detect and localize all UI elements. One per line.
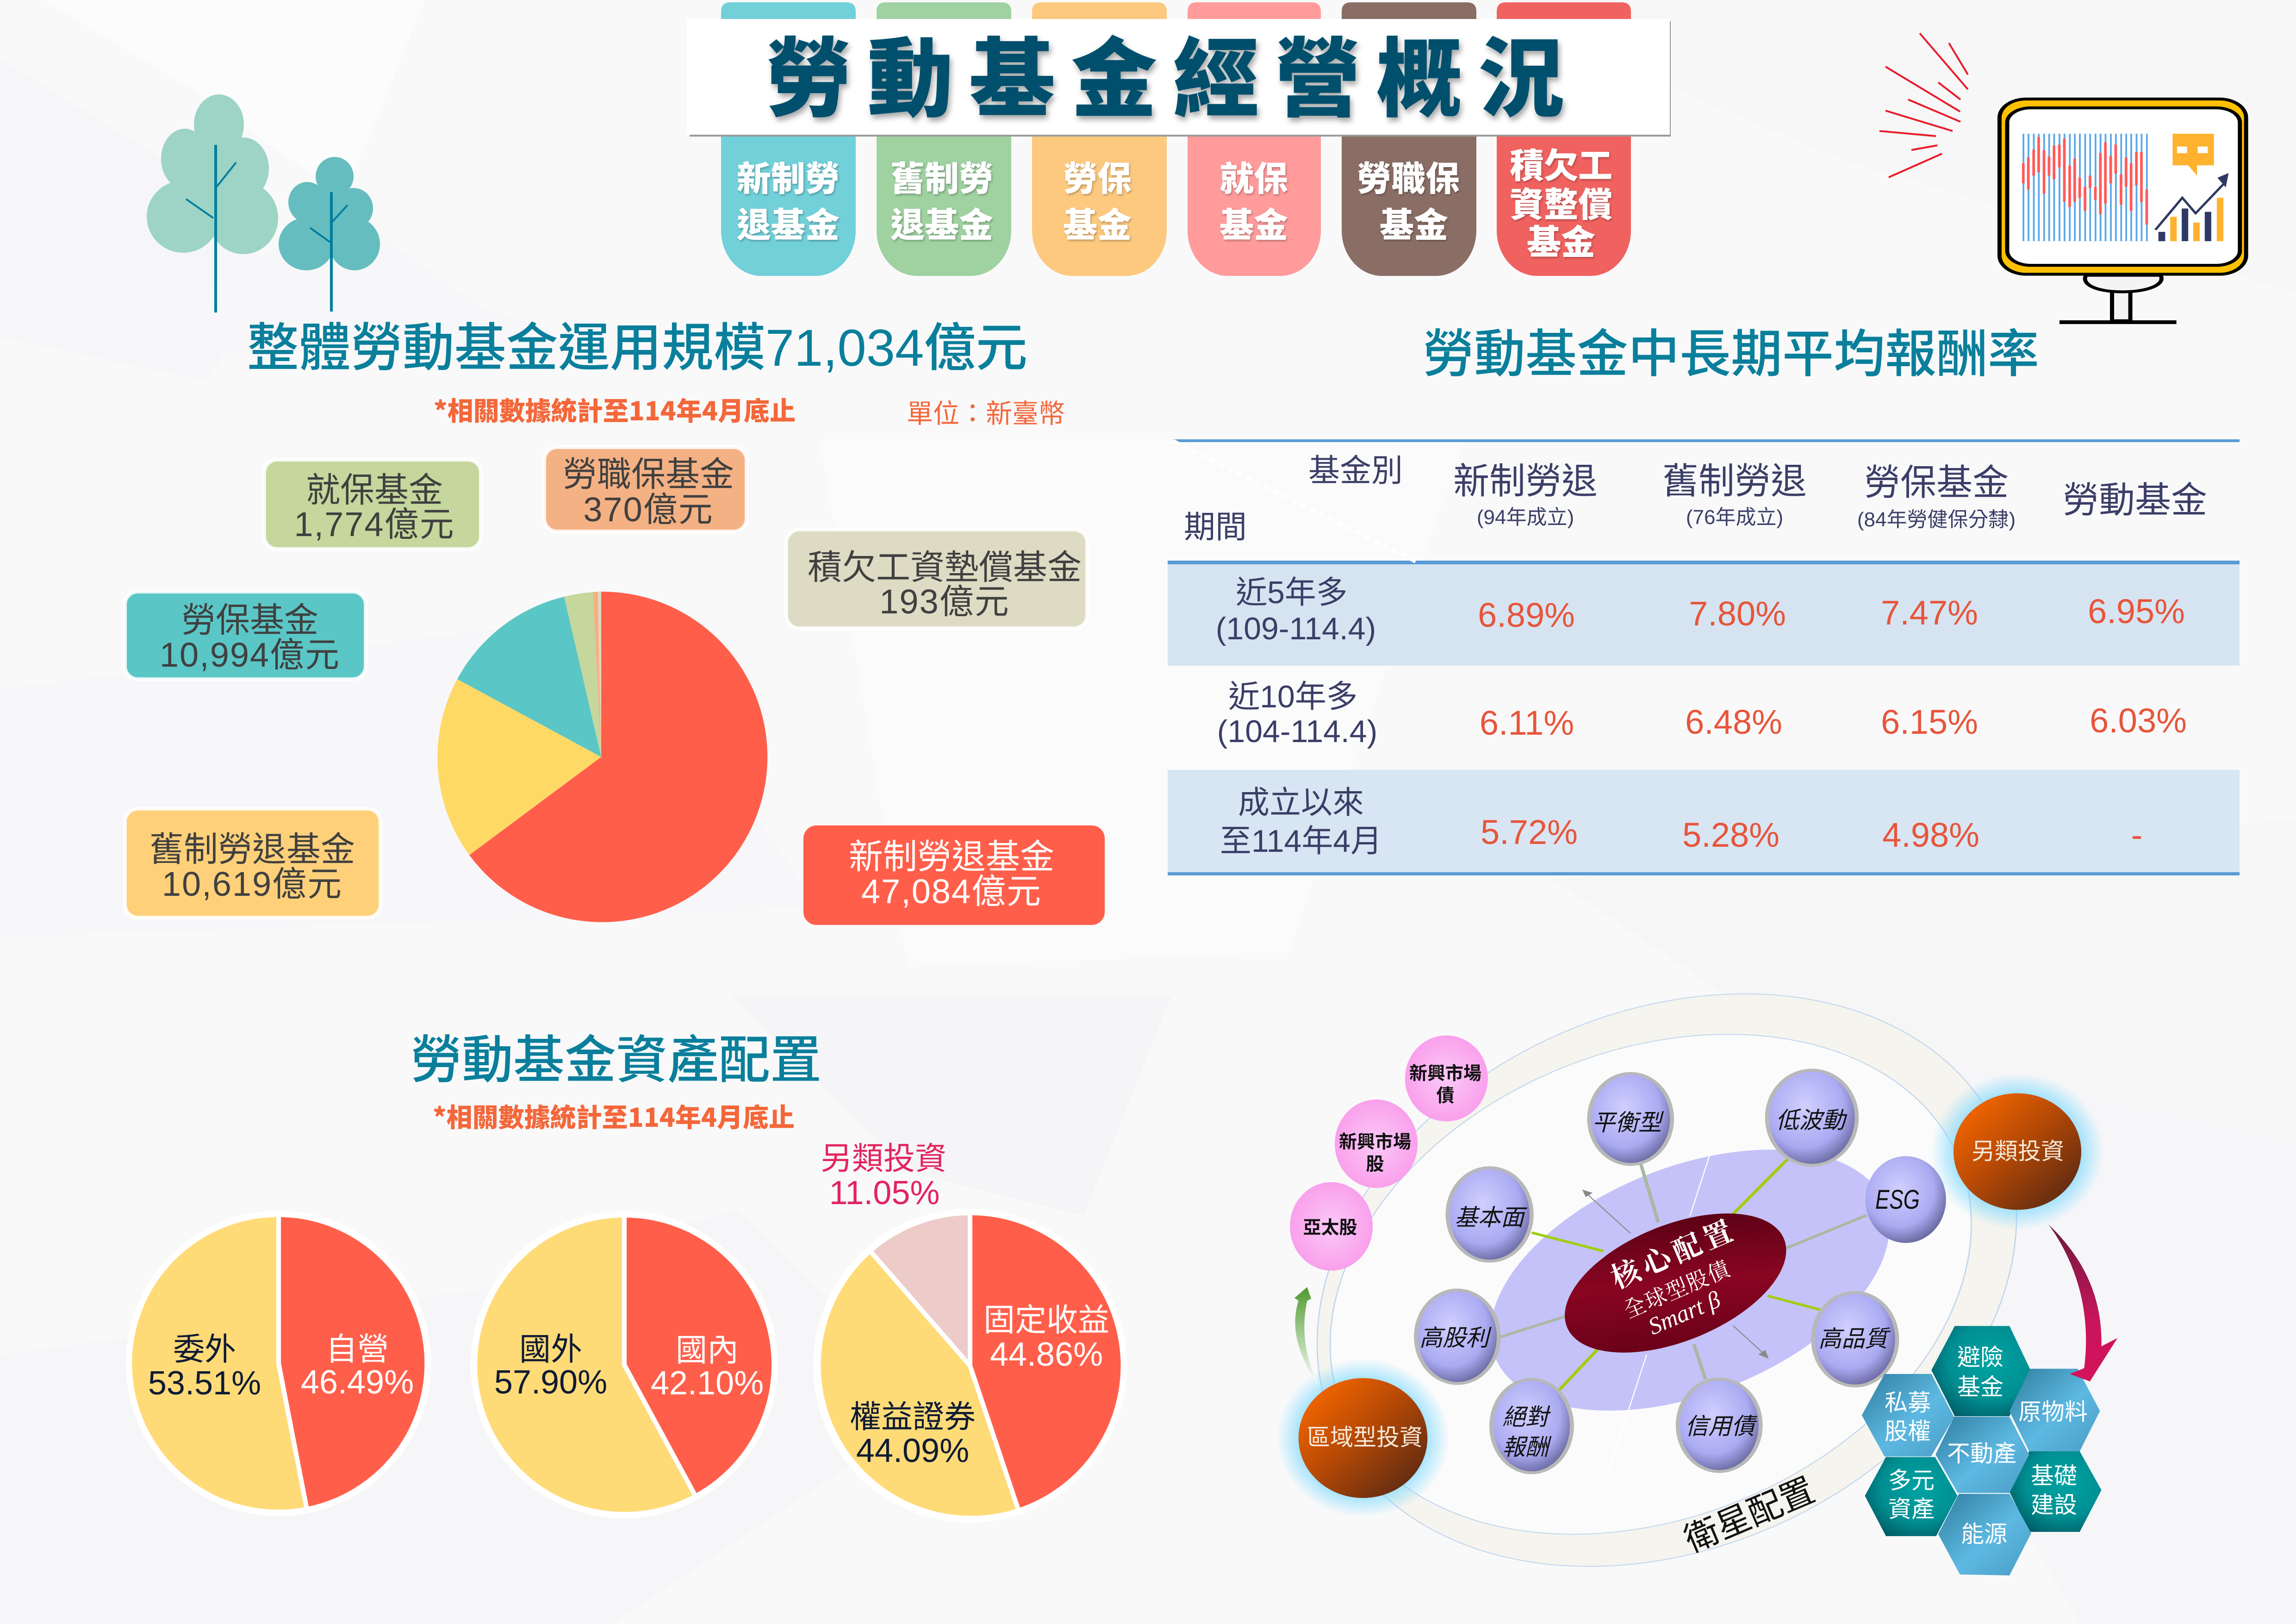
sphere labels: 另類投資 <box>1972 1138 2064 1164</box>
heading: long-term returns: 勞動基金中長期平均報酬率 <box>1423 325 2039 383</box>
table: returns <box>1168 439 2240 875</box>
sphere labels: 絕對 <box>1502 1404 1551 1430</box>
sphere labels: 高品質 <box>1818 1326 1891 1352</box>
pie chart: asset classes: 44.86% <box>990 1336 1103 1373</box>
sphere labels: 低波動 <box>1776 1107 1848 1133</box>
sphere labels: 亞太股 <box>1303 1218 1357 1238</box>
label: employment insurance fund: 1,774億元 <box>294 505 455 543</box>
label: employment insurance fund: 就保基金 <box>306 471 443 509</box>
tab labels: 退基金 <box>890 206 993 244</box>
pie chart: fund size <box>437 592 767 922</box>
arrow: green <box>1294 1287 1319 1386</box>
hexagon labels: 私募 <box>1885 1390 1931 1416</box>
sphere labels <box>1303 1064 2064 1460</box>
heading: total fund size: 整體勞動基金運用規模71,034億元 <box>247 319 1027 377</box>
hexagon labels: 基金 <box>1957 1374 2004 1400</box>
label: alternative investments: 另類投資 <box>821 1141 946 1176</box>
sphere labels: 基本面 <box>1455 1205 1527 1230</box>
table values: 4.98% <box>1882 816 1979 854</box>
satellite ring <box>1178 903 2156 1624</box>
hexagon labels: 資產 <box>1888 1496 1935 1522</box>
table values: 6.11% <box>1480 704 1574 742</box>
diagram shapes <box>1178 903 2156 1624</box>
table header: 期間 <box>1184 510 1247 545</box>
table row labels: 近10年多 <box>1228 679 1358 714</box>
fund tabs <box>721 2 1631 276</box>
table header <box>1184 453 2207 545</box>
table values: 6.95% <box>2088 592 2185 631</box>
label: old pension fund <box>125 809 380 918</box>
label: occupational insurance fund <box>544 447 747 531</box>
tab labels: 新制勞 <box>737 160 840 198</box>
pie chart: domestic vs overseas: 國外 <box>519 1332 582 1367</box>
glass spheres <box>1416 1070 1946 1473</box>
sphere labels: 報酬 <box>1502 1434 1552 1460</box>
hexagon labels: 避險 <box>1957 1344 2004 1370</box>
sphere labels: 信用債 <box>1685 1413 1758 1439</box>
arrow: crimson <box>2048 1224 2117 1381</box>
label: new pension fund <box>803 825 1105 925</box>
table header: 新制勞退 <box>1453 461 1598 501</box>
pie chart: self-managed vs outsourced <box>126 1211 431 1516</box>
sphere labels: 債 <box>1436 1086 1455 1106</box>
tab: old pension <box>877 2 1011 276</box>
pie chart: domestic vs overseas: 57.90% <box>494 1364 607 1401</box>
pie chart: self-managed vs outsourced: 53.51% <box>148 1365 261 1402</box>
tab: new pension <box>721 2 856 276</box>
tab: employment insurance <box>1188 2 1321 276</box>
table row labels: (109-114.4) <box>1216 611 1376 646</box>
label: new pension fund: 47,084億元 <box>861 872 1042 911</box>
hexagon labels: 多元 <box>1888 1468 1935 1493</box>
sphere labels: ESG <box>1875 1185 1920 1215</box>
table row labels: 近5年多 <box>1236 575 1348 610</box>
hexagon labels: 建設 <box>2031 1492 2077 1518</box>
tab labels: 就保 <box>1220 160 1288 198</box>
table values: 6.03% <box>2090 701 2187 740</box>
table header: 基金別 <box>1308 453 1403 488</box>
table row labels: 成立以來 <box>1238 785 1364 820</box>
table header: 勞動基金 <box>2063 480 2207 520</box>
pie chart: asset classes: 權益證券 <box>850 1399 976 1435</box>
tab labels: 基金 <box>1380 206 1448 244</box>
tab labels: 基金 <box>1527 223 1595 262</box>
pink spheres <box>1290 1036 1488 1271</box>
pie chart: domestic vs overseas: 42.10% <box>651 1365 764 1402</box>
hexagon labels: 股權 <box>1885 1418 1931 1444</box>
tab: labor insurance <box>1032 2 1167 276</box>
label: employment insurance fund <box>264 460 481 549</box>
pie chart: self-managed vs outsourced: 自營 <box>326 1332 389 1367</box>
table values: 7.47% <box>1881 593 1978 632</box>
note: allocation data date: *相關數據統計至114年4月底止 <box>433 1097 795 1135</box>
pie chart: self-managed vs outsourced: 委外 <box>173 1332 236 1367</box>
table values: 6.15% <box>1881 703 1978 741</box>
label: new pension fund: 新制勞退基金 <box>849 837 1054 876</box>
note: currency unit: 單位：新臺幣 <box>907 399 1065 429</box>
core label: 核心配置 <box>1604 1206 1742 1297</box>
hexagon labels: 能源 <box>1961 1521 2007 1547</box>
tab labels <box>737 147 1612 262</box>
core lavender ellipse <box>1421 1097 1958 1464</box>
table values: 5.28% <box>1682 816 1780 854</box>
hexagon labels: 原物料 <box>2018 1399 2088 1425</box>
table row labels <box>1216 575 1382 859</box>
pie chart: self-managed vs outsourced: 46.49% <box>301 1364 414 1401</box>
core ellipse <box>1529 1186 1822 1380</box>
table values: - <box>2131 816 2142 854</box>
tab: occupational insurance <box>1342 2 1476 276</box>
sphere labels: 區域型投資 <box>1307 1424 1423 1450</box>
label: wage arrears fund: 193億元 <box>879 582 1010 621</box>
sphere labels: 新興市場 <box>1409 1064 1481 1084</box>
table values: 6.48% <box>1685 703 1782 741</box>
tab labels: 退基金 <box>737 206 840 244</box>
table header: (84年勞健保分隸) <box>1857 508 2016 531</box>
heading: asset allocation: 勞動基金資產配置 <box>411 1031 821 1089</box>
table values <box>1478 592 2187 854</box>
hexagon labels: 不動產 <box>1947 1441 2016 1467</box>
label: occupational insurance fund: 370億元 <box>583 490 714 529</box>
hexagons <box>1862 1326 2102 1575</box>
title banner <box>687 9 1671 137</box>
hexagon labels: 基礎 <box>2031 1463 2077 1489</box>
table row labels: 至114年4月 <box>1220 824 1382 859</box>
table values: 6.89% <box>1478 596 1575 634</box>
sphere labels: 平衡型 <box>1592 1110 1664 1136</box>
core label: 全球型股債 <box>1618 1251 1735 1324</box>
title: 勞動基金經營概況 <box>765 9 1580 134</box>
label: alternative investments: 11.05% <box>829 1174 940 1212</box>
pie chart: domestic vs overseas: 國內 <box>676 1333 739 1368</box>
sphere labels: 新興市場 <box>1339 1132 1411 1152</box>
core label: Smart β <box>1644 1287 1724 1340</box>
spokes <box>1497 1154 1867 1477</box>
table header: 舊制勞退 <box>1662 461 1807 501</box>
pie chart: domestic vs overseas <box>471 1211 778 1518</box>
tab labels: 舊制勞 <box>890 160 993 198</box>
label: occupational insurance fund: 勞職保基金 <box>563 455 734 493</box>
tab: wage arrears <box>1497 2 1631 276</box>
label: old pension fund: 10,619億元 <box>162 865 342 903</box>
tab labels: 資整償 <box>1510 186 1612 224</box>
diagram: core-satellite allocation <box>1178 903 2156 1624</box>
label: old pension fund: 舊制勞退基金 <box>149 830 355 868</box>
note: data date: *相關數據統計至114年4月底止 <box>434 391 796 428</box>
icon: monitor with charts <box>1999 99 2246 324</box>
label: labor insurance fund <box>125 592 366 679</box>
label: wage arrears fund: 積欠工資墊償基金 <box>808 548 1082 587</box>
pie chart: asset classes <box>813 1209 1127 1523</box>
label: alternative investments <box>821 1141 946 1212</box>
hexagon labels <box>1885 1344 2088 1547</box>
table header: (76年成立) <box>1686 506 1783 529</box>
tab labels: 基金 <box>1063 206 1132 244</box>
label: labor insurance fund: 勞保基金 <box>181 601 318 639</box>
table values: 7.80% <box>1689 594 1786 633</box>
satellite label: 衛星配置 <box>1679 1470 1820 1560</box>
table values: 5.72% <box>1481 813 1578 851</box>
table header: (94年成立) <box>1477 506 1574 529</box>
tab labels: 積欠工 <box>1510 147 1612 185</box>
core label <box>1604 1206 1742 1340</box>
pie chart: asset classes: 44.09% <box>856 1432 969 1469</box>
tab labels: 基金 <box>1220 206 1288 244</box>
icon: red rays <box>1879 33 1968 177</box>
label: labor insurance fund: 10,994億元 <box>160 636 340 674</box>
table row labels: (104-114.4) <box>1217 714 1377 749</box>
tab labels: 勞保 <box>1063 160 1132 198</box>
glow and orange spheres <box>1276 1073 2104 1518</box>
pie chart: asset classes: 固定收益 <box>983 1303 1109 1338</box>
icon: trees <box>147 94 380 312</box>
sphere labels: 股 <box>1366 1155 1384 1174</box>
tab labels: 勞職保 <box>1357 160 1460 198</box>
table header: 勞保基金 <box>1864 462 2009 503</box>
label: wage arrears fund <box>786 530 1087 628</box>
sphere labels: 高股利 <box>1419 1325 1492 1351</box>
